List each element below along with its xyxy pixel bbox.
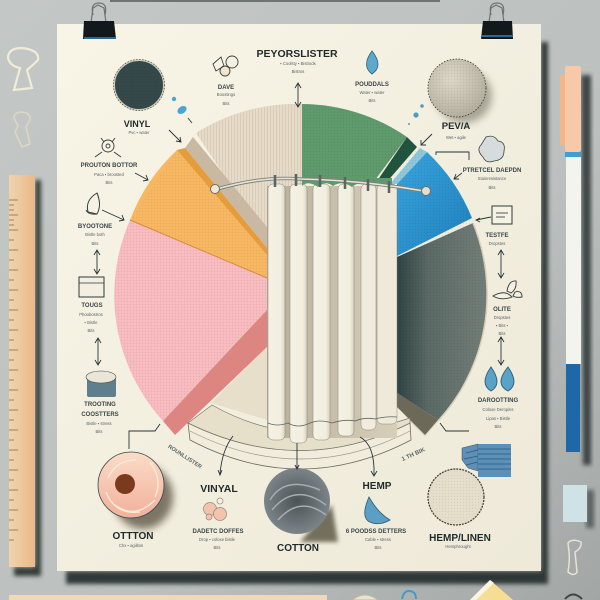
label: vinyl with bubbles: Bits xyxy=(214,545,220,550)
icon and label: protection cotton: PROUTON BOTTOR xyxy=(81,163,138,169)
label: vinyl: Pvc ▪ water xyxy=(128,130,150,135)
slice: inner beige xyxy=(211,347,267,420)
icon and label: droplet: Water ▪ water xyxy=(359,90,385,95)
label: vinyl with bubbles xyxy=(192,483,244,550)
tape roll bottom xyxy=(352,595,378,600)
double arrow left 2 xyxy=(95,338,101,365)
icon and label: dive xyxy=(213,56,238,106)
label: dampening: Lipas ▪ Bistle xyxy=(486,416,511,421)
sticky note xyxy=(470,580,513,600)
curtain pleats xyxy=(268,184,285,440)
label: hemp with drop: 6 POODSS DETTERS xyxy=(346,529,406,535)
icon and label: ecotone leaf: BYOOTONE xyxy=(78,224,112,230)
icon: fabric stack xyxy=(462,444,511,477)
curved text right: 1 TH BIK xyxy=(401,447,427,463)
label: tradition coloring: Bits xyxy=(96,429,102,434)
label: textile: TESTFE xyxy=(485,233,509,239)
icon and label: protection cotton xyxy=(81,138,138,185)
paper clip lower right xyxy=(568,540,581,574)
icon and label: ecotone leaf: Bits xyxy=(92,241,98,246)
bracket arrow xyxy=(436,152,469,160)
paper shadow xyxy=(66,42,548,584)
curtain scallops xyxy=(302,178,392,187)
label: hemp with drop: Bits xyxy=(375,545,381,550)
icon: water drops xyxy=(485,367,514,391)
curved text left: ROUNLLISTER xyxy=(167,444,203,470)
icon and label: dive: Bits xyxy=(223,101,229,106)
arrow: protection xyxy=(135,173,148,181)
label: dampening: DAROOTTING xyxy=(478,398,518,404)
arrow: vinyl xyxy=(218,436,233,475)
binder clip right xyxy=(481,3,513,39)
label: olite: ▪ Bits ▪ xyxy=(496,323,509,328)
arrow: peva to pie xyxy=(421,134,432,145)
slice band: dark pink xyxy=(163,310,267,435)
swatch: peva xyxy=(428,59,492,123)
icon and label: dive: DAVE xyxy=(218,85,234,91)
icon: tape roll xyxy=(86,371,116,397)
icon and label: protection cotton: Paca ▪ broosted xyxy=(94,172,124,177)
label: dampening xyxy=(478,398,518,429)
label: tougs: ▪ Bistle xyxy=(85,320,98,325)
label: hemp/linen: Hemphrought xyxy=(445,544,472,549)
slice: green xyxy=(302,104,407,180)
icon: textile card xyxy=(492,206,512,224)
heading: polyester: Bistros xyxy=(292,69,304,74)
label: vinyl: VINYL xyxy=(124,119,151,129)
icon: leaf sprig xyxy=(493,281,522,299)
label: stretch design: Stainresistance xyxy=(478,176,507,181)
label: tougs xyxy=(79,303,103,333)
arrow: vinyl to pie xyxy=(169,130,181,142)
icon and label: protection cotton: Bits xyxy=(106,180,112,185)
icon and label: ecotone leaf xyxy=(78,193,112,246)
label: peva: PEV/A xyxy=(442,121,470,132)
heading: polyester xyxy=(256,48,338,74)
blue clip bottom xyxy=(402,591,416,599)
label: tradition coloring: TROOTING xyxy=(84,402,116,408)
slice band: taupe xyxy=(185,137,267,248)
label: hemp with drop xyxy=(346,481,406,550)
label: olite: OLITE xyxy=(493,307,511,313)
water drops near vinyl xyxy=(172,97,192,123)
label: tradition coloring xyxy=(81,402,119,434)
arrow: polyester xyxy=(295,83,301,107)
label: olite: Bits xyxy=(499,331,505,336)
swatch: hemp/linen xyxy=(428,469,484,525)
arrow: textile xyxy=(476,217,491,222)
label: vinyl xyxy=(124,119,151,135)
pie chart with fabric slices xyxy=(114,104,487,436)
icon and label: droplet xyxy=(355,51,389,103)
label: dampening: Bits xyxy=(495,424,501,429)
clip bottom edge xyxy=(565,594,582,599)
label: vinyl with bubbles: Drop ▪ coloxe bistle xyxy=(199,537,236,542)
label: vinyl with bubbles: VINYAL xyxy=(200,483,238,495)
label: cotton: COTTON xyxy=(277,543,319,554)
ruler vertical xyxy=(9,175,35,567)
curtain rod with rings xyxy=(210,174,430,196)
label: vinyl with bubbles: DADETC DOFFES xyxy=(192,529,244,535)
paper clip small xyxy=(14,112,30,147)
heading: polyester: PEYORSLISTER xyxy=(256,48,338,60)
label: stretch design xyxy=(463,168,521,190)
label: hemp with drop: Cable ▪ stress xyxy=(365,537,391,542)
marker pen xyxy=(560,66,581,452)
label: dampening: Coloxe Deropins xyxy=(483,407,513,412)
label: tradition coloring: Bistle ▪ stress xyxy=(86,421,112,426)
slice: orange xyxy=(130,150,267,278)
ruler shadow xyxy=(14,180,41,576)
paper sheet xyxy=(57,24,541,571)
icon and label: ecotone leaf: Bistle both xyxy=(85,232,105,237)
yarn ball: cotton xyxy=(264,468,338,542)
label: tradition coloring: COOSTTERS xyxy=(81,412,119,418)
label: peva: Wet ▪ agile xyxy=(446,135,467,140)
slice band: dark olive xyxy=(397,393,438,435)
label: stretch design: PTRETCEL DAEPDN xyxy=(463,168,521,174)
callout line left xyxy=(129,424,160,449)
label: tougs: Phoobostros xyxy=(79,312,103,317)
icon: window box xyxy=(79,277,104,297)
arrow: stretch design xyxy=(454,173,462,179)
label: hemp/linen: HEMP/LINEN xyxy=(429,533,491,544)
fabric texture xyxy=(114,104,487,421)
marker pen shadow xyxy=(581,75,591,465)
slice: grey xyxy=(397,223,487,420)
eraser shadow xyxy=(586,490,594,528)
icon and label: dive: Boostings xyxy=(217,92,235,97)
binder clip left xyxy=(83,3,116,39)
ruler horizontal xyxy=(9,595,327,600)
spool: cotton xyxy=(98,452,173,529)
slice: polyester beige xyxy=(196,104,302,240)
curtain hem line xyxy=(268,417,397,426)
water drops near peva xyxy=(408,104,424,125)
swatch: vinyl xyxy=(114,60,164,110)
arrow: to yarn xyxy=(295,443,299,469)
eraser block xyxy=(563,485,587,522)
label: tougs: TOUGS xyxy=(81,303,103,309)
label: textile xyxy=(485,233,509,246)
label: cotton left: Chx ▪ agilitos xyxy=(119,543,143,548)
curtain base platform xyxy=(188,405,411,469)
slice: blue xyxy=(397,152,472,256)
icon and label: droplet: POUDDALS xyxy=(355,82,389,88)
slice: pink xyxy=(114,220,267,421)
label: hemp/linen xyxy=(429,533,491,549)
icon and label: droplet: Bits xyxy=(369,98,375,103)
arrow: ecotone xyxy=(102,210,124,221)
label: hemp with drop: HEMP xyxy=(363,481,392,492)
label: textile: Dropstes xyxy=(489,241,505,246)
label: peva xyxy=(442,121,470,140)
double arrow left 1 xyxy=(94,250,100,274)
shower curtain xyxy=(267,178,397,443)
label: tougs: Bits xyxy=(88,328,94,333)
heading: polyester: ▪ Coolsty ▪ Bistrods xyxy=(280,61,316,66)
paper clip large xyxy=(8,48,38,90)
double arrow right 2 xyxy=(498,337,504,365)
label: olite xyxy=(493,307,511,336)
icon: cotton cloud xyxy=(479,136,504,162)
label: stretch design: Bits xyxy=(489,185,495,190)
double arrow right 1 xyxy=(498,250,504,278)
label: cotton left: OTTTON xyxy=(113,531,153,542)
callout line right xyxy=(440,423,469,431)
label: olite: Dropstes xyxy=(494,315,510,320)
arrow: hemp xyxy=(360,437,377,476)
label: cotton left xyxy=(113,531,153,548)
